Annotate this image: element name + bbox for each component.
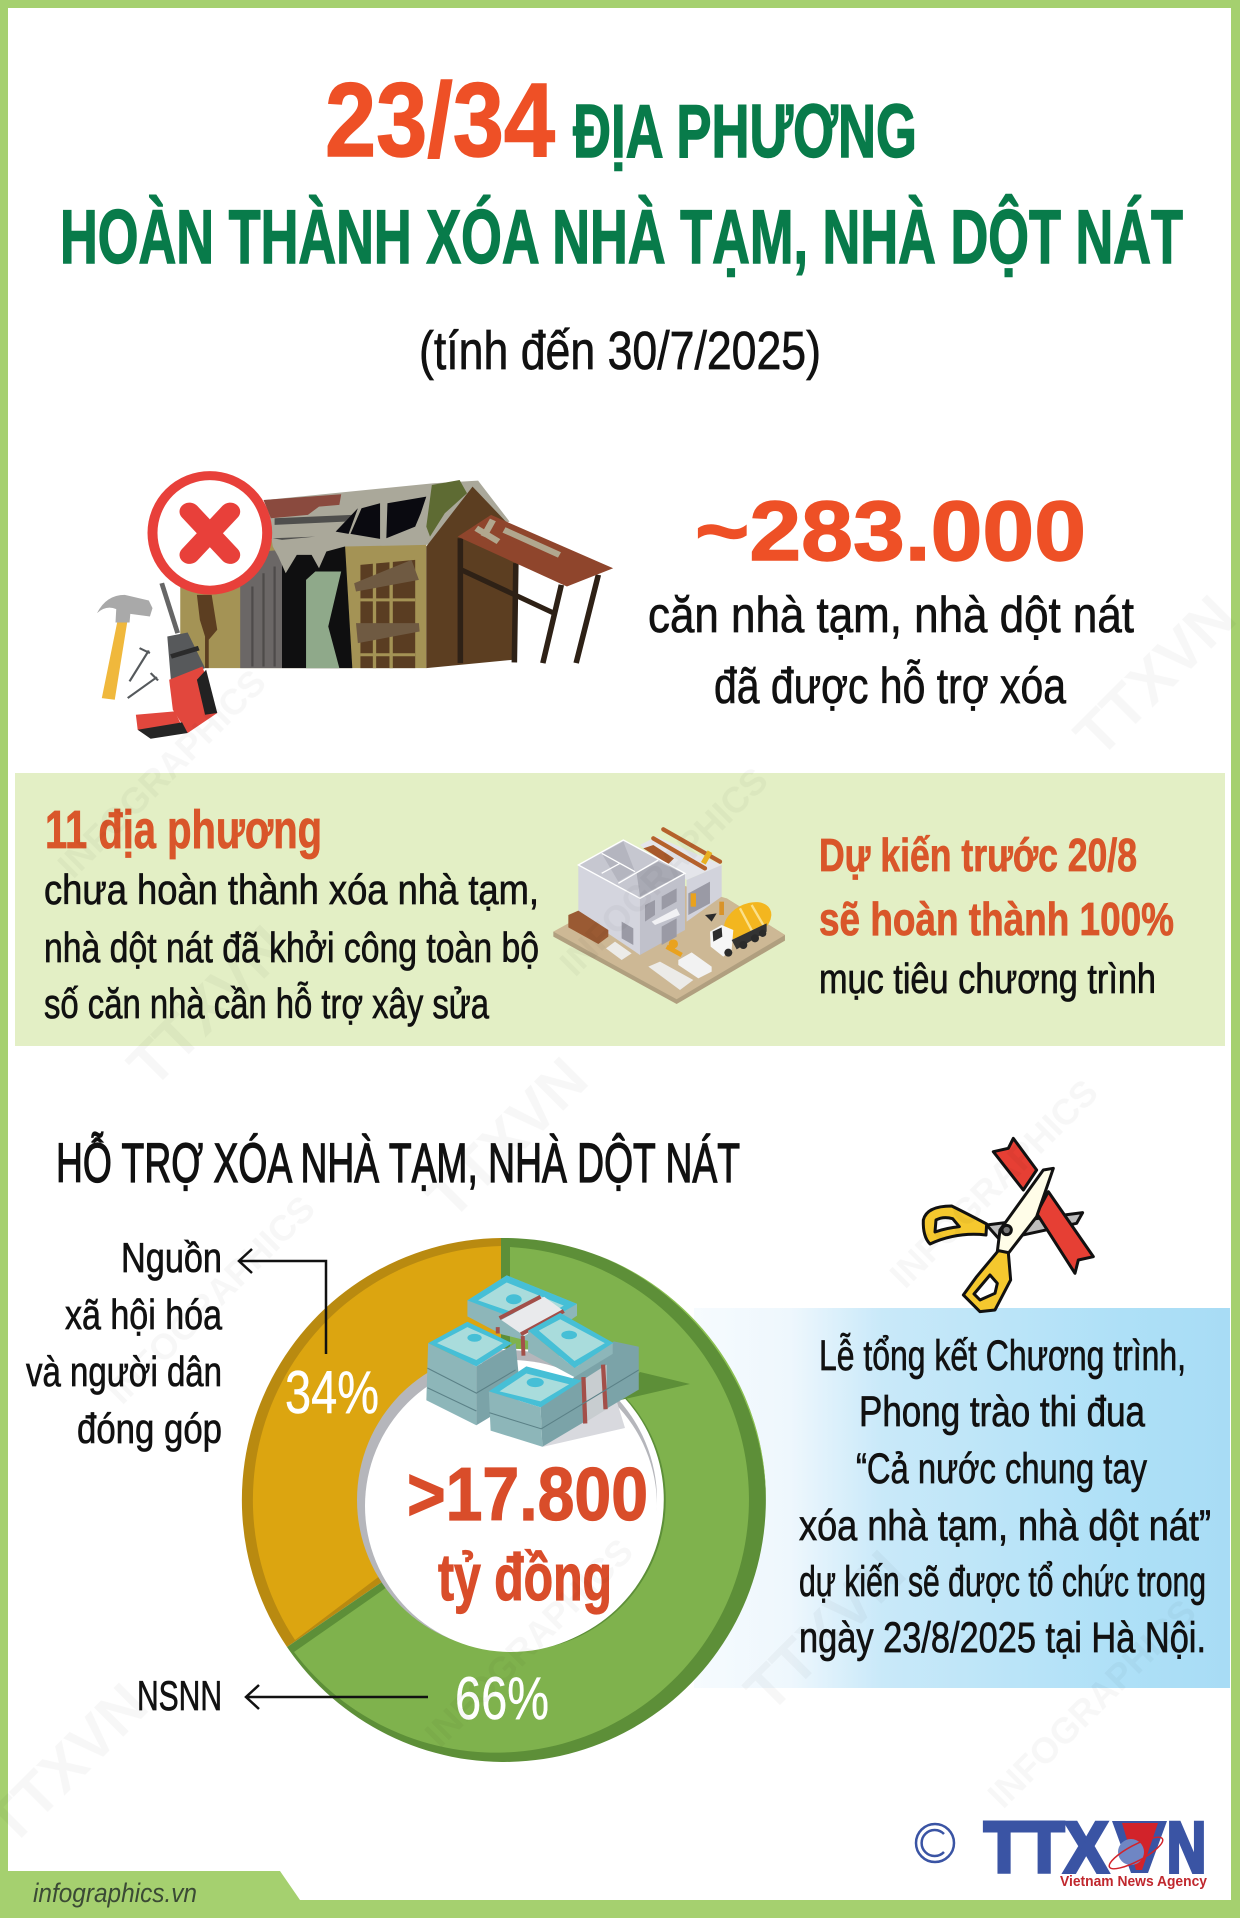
segment: socialised sources 34% xyxy=(242,1238,501,1647)
text: localities not finished: nhà dột nát đã khởi công toàn bộ xyxy=(44,924,539,971)
icon: construction site xyxy=(553,829,785,1004)
stat: houses removed: căn nhà tạm, nhà dột nát xyxy=(648,587,1134,643)
icon: money stacks xyxy=(426,1275,639,1447)
donut hole xyxy=(357,1350,657,1652)
text: TTXVN xyxy=(732,1538,918,1724)
text: INFOGRAPHICS xyxy=(50,661,274,886)
text: expected completion xyxy=(819,829,1174,1002)
value: total funding: tỷ đồng xyxy=(438,1540,612,1614)
panel: summary ceremony xyxy=(694,1308,1230,1688)
panel: summary ceremony: “Cả nước chung tay xyxy=(856,1445,1147,1493)
text: expected completion: mục tiêu chương trình xyxy=(819,955,1156,1002)
stat: houses removed: đã được hỗ trợ xóa xyxy=(714,658,1066,714)
text: localities not finished: chưa hoàn thành xóa nhà tạm, xyxy=(44,866,539,913)
text: INFOGRAPHICS xyxy=(882,1071,1106,1296)
label: socialised sources: Nguồn xyxy=(121,1234,222,1281)
panel: summary ceremony: Phong trào thi đua xyxy=(859,1388,1145,1436)
text: TTXVN xyxy=(414,1045,600,1231)
text: localities not finished xyxy=(44,800,539,1027)
text: INFOGRAPHICS xyxy=(99,1187,323,1412)
logo: TTXVN: TTX xyxy=(984,1809,1108,1888)
label: socialised sources xyxy=(26,1234,223,1452)
title: 23/34 xyxy=(325,62,555,179)
panel: 11 localities xyxy=(15,773,1225,1046)
value: total funding: >17.800 xyxy=(407,1452,648,1536)
text: expected completion: Dự kiến trước 20/8 xyxy=(819,829,1137,881)
arrow: 34% to label xyxy=(239,1249,326,1354)
value: total funding xyxy=(407,1452,648,1614)
text: INFOGRAPHICS xyxy=(417,1530,641,1755)
label: 66%: 66% xyxy=(455,1665,549,1732)
logo: TTXVN xyxy=(984,1809,1208,1890)
label: socialised sources: đóng góp xyxy=(77,1405,222,1452)
label: state budget: NSNN xyxy=(137,1672,222,1719)
text: localities not finished: 11 địa phương xyxy=(45,800,322,860)
stat: houses removed xyxy=(648,484,1134,714)
text: INFOGRAPHICS xyxy=(552,759,776,984)
icon: scissors cutting ribbon xyxy=(923,1138,1093,1312)
text: TTXVN xyxy=(115,913,301,1099)
source: infographics.vn: infographics.vn xyxy=(33,1878,197,1908)
label: 34%: 34% xyxy=(285,1359,379,1426)
label: socialised sources: và người dân xyxy=(26,1348,222,1395)
segment: state budget 66% xyxy=(287,1238,766,1762)
title: ĐỊA PHƯƠNG xyxy=(573,89,917,173)
arrow: 66% to label xyxy=(246,1685,428,1709)
title xyxy=(60,62,1183,280)
icon: copyright xyxy=(916,1824,954,1862)
text: localities not finished: số căn nhà cần hỗ trợ xây sửa xyxy=(44,980,490,1027)
icon: dilapidated house with tools xyxy=(97,476,613,739)
text: INFOGRAPHICS xyxy=(980,1591,1204,1816)
label: socialised sources: xã hội hóa xyxy=(65,1291,223,1338)
logo: TTXVN: N xyxy=(1167,1809,1206,1888)
chart: donut funding share xyxy=(242,1238,766,1762)
stat: houses removed: ~283.000 xyxy=(695,484,1086,578)
logo: TTXVN: Vietnam News Agency xyxy=(1060,1873,1208,1890)
subtitle date: (tính đến 30/7/2025) xyxy=(419,321,821,381)
heading: support: HỖ TRỢ XÓA NHÀ TẠM, NHÀ DỘT NÁT xyxy=(56,1131,740,1194)
